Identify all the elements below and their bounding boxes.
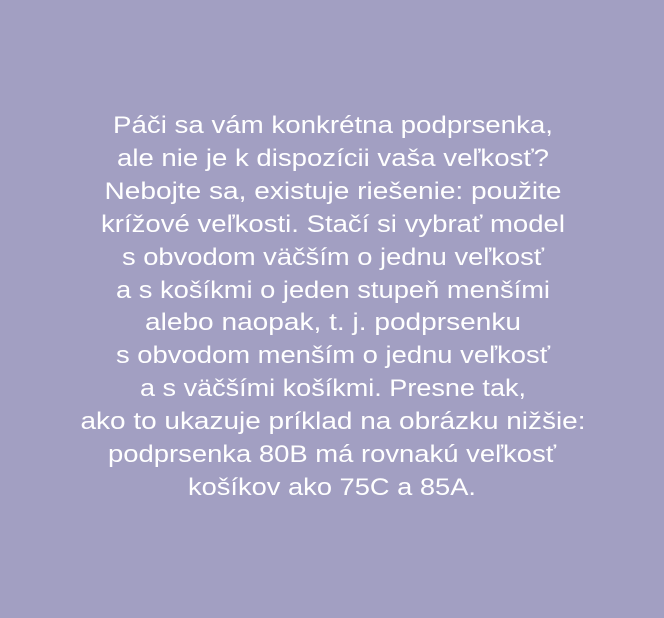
text block: cross sizes explanation: ale nie je k dispozícii vaša veľkosť? bbox=[117, 145, 549, 172]
text block: cross sizes explanation: krížové veľkosti. Stačí si vybrať model bbox=[101, 211, 565, 238]
text block: cross sizes explanation: a s košíkmi o jeden stupeň menšími bbox=[116, 277, 550, 304]
text block: cross sizes explanation: a s väčšími košíkmi. Presne tak, bbox=[140, 375, 526, 402]
text block: cross sizes explanation: Páči sa vám konkrétna podprsenka, bbox=[113, 112, 553, 139]
text block: cross sizes explanation: alebo naopak, t. j. podprsenku bbox=[145, 309, 521, 336]
text block: cross sizes explanation: podprsenka 80B má rovnakú veľkosť bbox=[108, 441, 557, 468]
text block: cross sizes explanation bbox=[80, 112, 586, 501]
text block: cross sizes explanation: s obvodom väčším o jednu veľkosť bbox=[122, 244, 545, 271]
text block: cross sizes explanation: Nebojte sa, existuje riešenie: použite bbox=[104, 178, 562, 205]
text block: cross sizes explanation: ako to ukazuje príklad na obrázku nižšie: bbox=[80, 408, 586, 435]
text block: cross sizes explanation: košíkov ako 75C a 85A. bbox=[188, 474, 476, 501]
text block: cross sizes explanation: s obvodom menším o jednu veľkosť bbox=[116, 342, 551, 369]
